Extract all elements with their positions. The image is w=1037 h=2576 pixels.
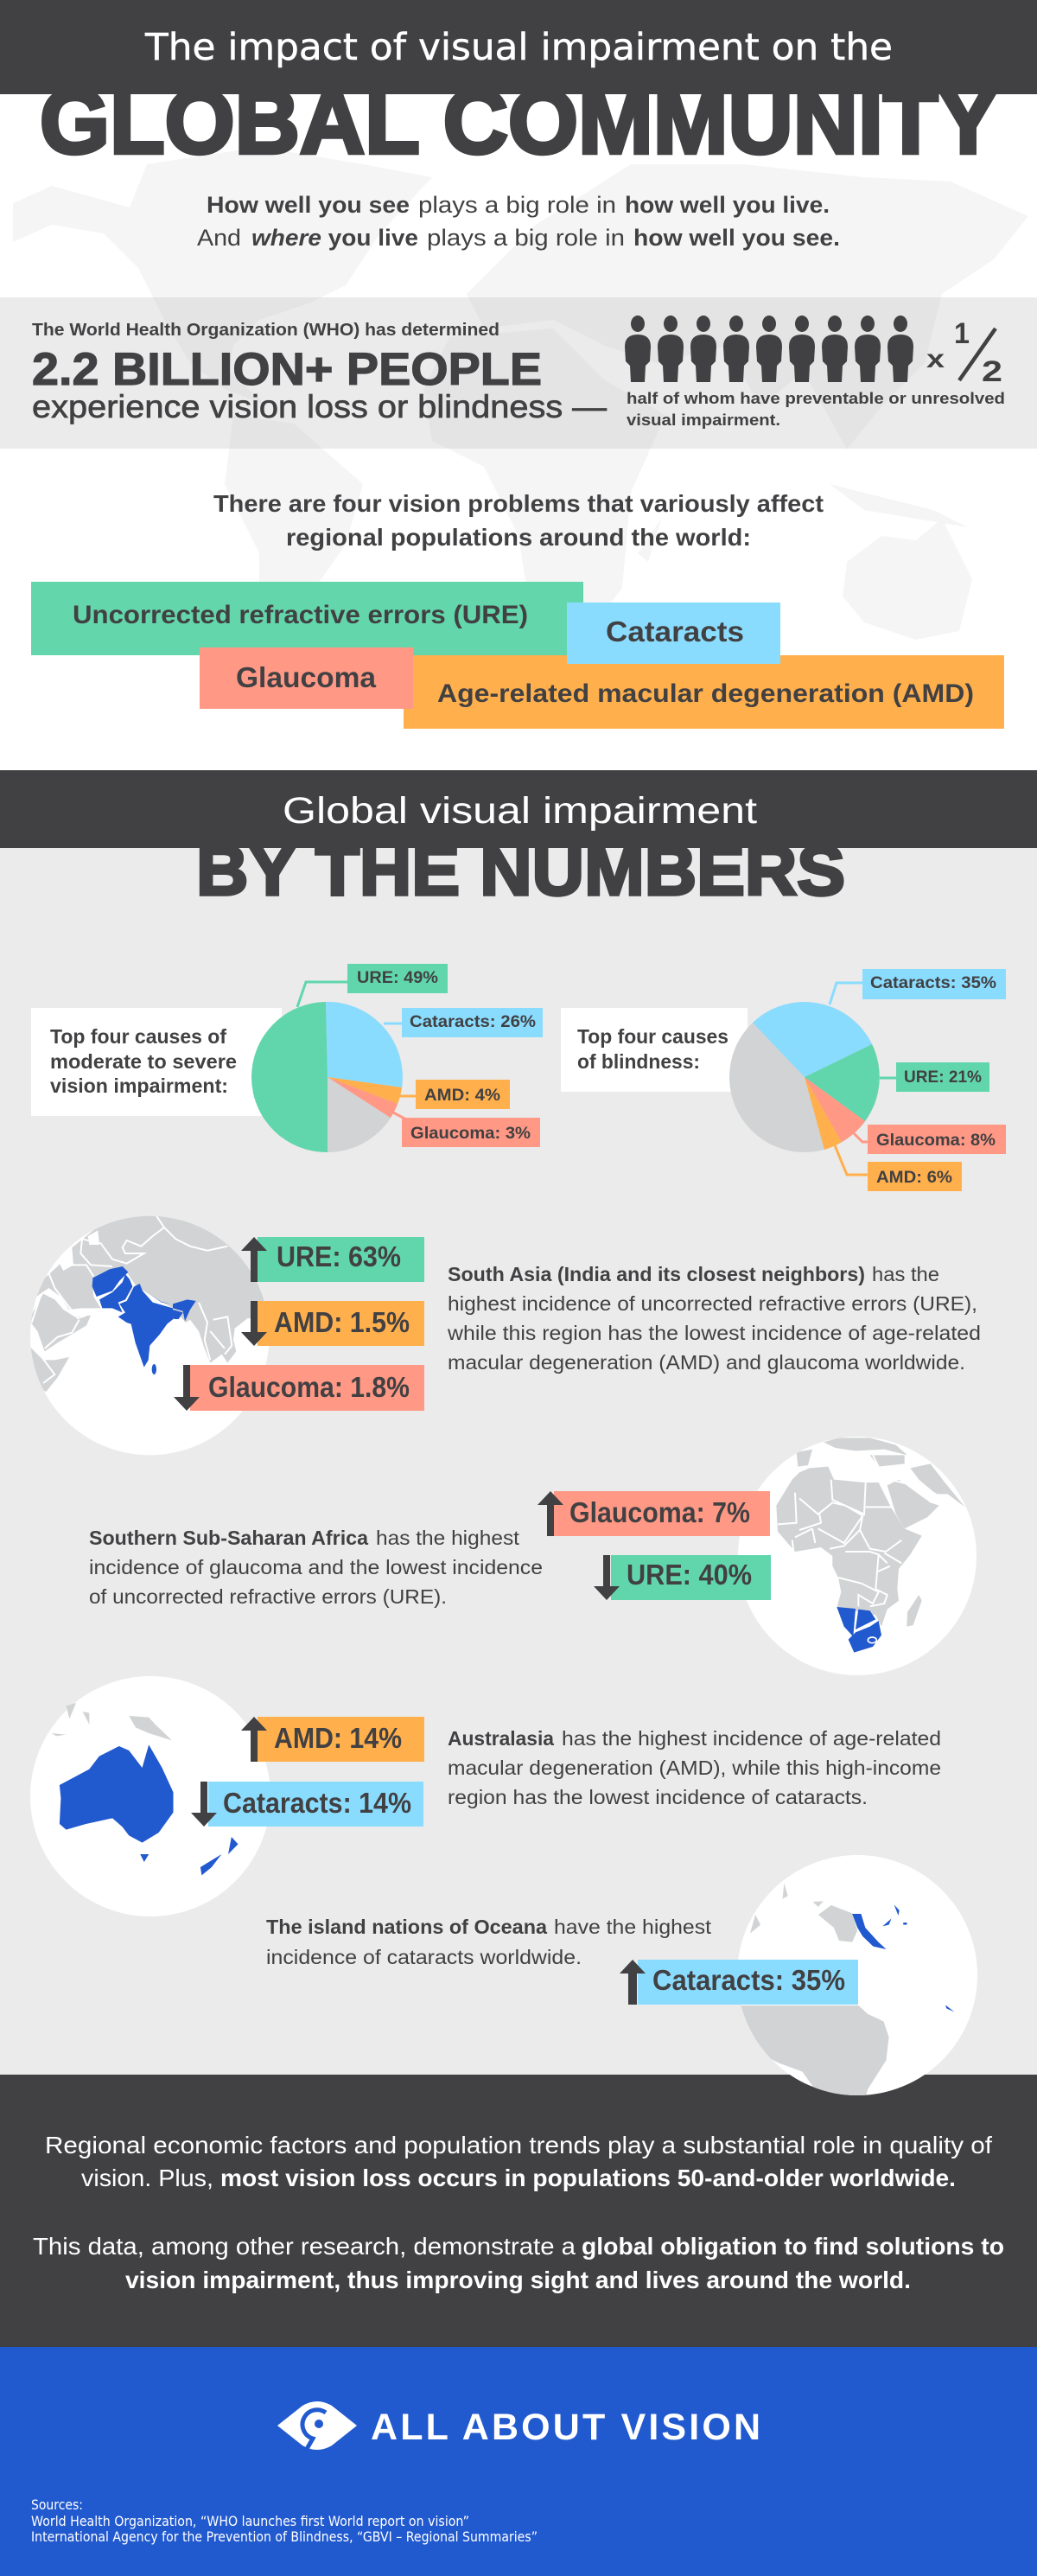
label: AMD 6% bbox=[835, 1145, 962, 1191]
section bar: Global visual impairment: Global visual impairment bbox=[283, 790, 757, 832]
label: URE 21%: URE: 21% bbox=[904, 1068, 982, 1087]
stat: AMD 1.5% down bbox=[241, 1301, 424, 1346]
stat: URE 40% down: URE: 40% bbox=[627, 1559, 752, 1591]
panel: Australasia bbox=[30, 1676, 941, 1916]
text: Southern Sub-Saharan Africa: has the highest bbox=[376, 1527, 520, 1549]
intro text: how well you live. bbox=[625, 192, 830, 218]
caption box bbox=[561, 1008, 748, 1092]
sources bbox=[31, 2496, 538, 2545]
header bar with title line: The impact of visual impairment on the bbox=[144, 26, 893, 69]
text: Oceania: incidence of cataracts worldwide. bbox=[266, 1946, 582, 1968]
times one half: x bbox=[926, 345, 945, 373]
label: AMD 6%: AMD: 6% bbox=[876, 1168, 952, 1187]
label: Cataracts 35%: Cataracts: 35% bbox=[870, 973, 996, 992]
closing text: vision impairment, thus improving sight and lives around the world. bbox=[125, 2267, 911, 2293]
stat: Cataracts 14% down bbox=[191, 1782, 423, 1827]
caption box: Top four causes of bbox=[50, 1025, 226, 1048]
closing text: vision. Plus, bbox=[81, 2165, 213, 2191]
closing text: most vision loss occurs in populations 50-and-older worldwide. bbox=[220, 2165, 956, 2191]
background: numbers section bbox=[0, 848, 1037, 2075]
tag: URE bbox=[31, 582, 583, 655]
label: AMD 4%: AMD: 4% bbox=[424, 1086, 500, 1105]
intro text: plays a big role in bbox=[427, 225, 625, 251]
caption box: moderate to severe bbox=[50, 1050, 237, 1073]
stat: Cataracts 35% up bbox=[620, 1960, 858, 2005]
tag: Glaucoma: Glaucoma bbox=[236, 661, 377, 693]
tag: Cataracts: Cataracts bbox=[606, 615, 744, 647]
stat: URE 63% up bbox=[241, 1237, 424, 1282]
caption box: Top four causes bbox=[577, 1025, 728, 1048]
tag: Cataracts bbox=[567, 603, 780, 664]
stat: Cataracts 35% up: Cataracts: 35% bbox=[652, 1964, 845, 1996]
world map watermark bbox=[13, 147, 1028, 666]
text: South Asia: has the bbox=[872, 1263, 939, 1285]
WHO statistic text: 2.2 BILLION+ PEOPLE bbox=[32, 344, 542, 395]
label: Glaucoma 8% bbox=[853, 1125, 1006, 1154]
lead-in to four vision problems: regional populations around the world: bbox=[286, 524, 751, 551]
stat: Cataracts 14% down: Cataracts: 14% bbox=[223, 1787, 411, 1819]
logo: All About Vision bbox=[277, 2401, 760, 2450]
text: South Asia: South Asia (India and its closest neighbors) bbox=[448, 1263, 865, 1285]
times one half bbox=[926, 317, 1002, 388]
tag: AMD bbox=[404, 655, 1004, 729]
stat: Glaucoma 1.8% down bbox=[174, 1365, 424, 1411]
stat: Glaucoma 7% up: Glaucoma: 7% bbox=[569, 1496, 750, 1528]
text: Australasia: Australasia bbox=[448, 1727, 554, 1750]
intro text: How well you see bbox=[207, 192, 410, 218]
gray band: WHO statistic background bbox=[0, 297, 1037, 449]
WHO statistic text: The World Health Organization (WHO) has determined bbox=[32, 321, 499, 340]
text: South Asia: highest incidence of uncorrected refractive errors (URE), bbox=[448, 1292, 977, 1315]
sources: International Agency for the Prevention of Blindness, “GBVI – Regional Summaries” bbox=[31, 2528, 538, 2545]
icon: row of nine people bbox=[625, 316, 913, 382]
tag: URE: Uncorrected refractive errors (URE) bbox=[73, 601, 528, 629]
label: Glaucoma 8%: Glaucoma: 8% bbox=[876, 1131, 996, 1150]
text: Oceania: The island nations of Oceana bbox=[266, 1916, 547, 1938]
sources: World Health Organization, “WHO launches first World report on vision” bbox=[31, 2513, 469, 2529]
text: South Asia: while this region has the lowest incidence of age-related bbox=[447, 1322, 981, 1344]
intro text: where you live bbox=[251, 225, 418, 251]
half-of-whom note bbox=[627, 389, 1005, 429]
text: Southern Sub-Saharan Africa: Southern Sub-Saharan Africa bbox=[89, 1527, 368, 1549]
footer background bbox=[0, 2347, 1037, 2576]
label: URE 49% bbox=[297, 964, 448, 1007]
logo: All About Vision: ALL ABOUT VISION bbox=[371, 2407, 760, 2448]
intro text: plays a big role in bbox=[418, 192, 616, 218]
label: Glaucoma 3%: Glaucoma: 3% bbox=[410, 1124, 531, 1143]
half-of-whom note: half of whom have preventable or unresolved bbox=[627, 389, 1005, 407]
globe: Africa bbox=[738, 1437, 977, 1675]
half-of-whom note: visual impairment. bbox=[627, 411, 780, 429]
pie chart bbox=[251, 1002, 403, 1152]
WHO statistic text bbox=[32, 321, 607, 424]
text: Australasia: has the highest incidence of age-related bbox=[562, 1727, 941, 1750]
text: Southern Sub-Saharan Africa: incidence of glaucoma and the lowest incidence bbox=[89, 1556, 543, 1578]
icon: eye bbox=[277, 2401, 357, 2450]
caption box: of blindness: bbox=[577, 1050, 700, 1073]
text: Australasia bbox=[448, 1727, 941, 1808]
panel: South Asia bbox=[29, 1212, 981, 1455]
label: URE 49%: URE: 49% bbox=[357, 968, 438, 987]
caption box bbox=[31, 1008, 282, 1116]
times one half: 2 bbox=[982, 355, 1002, 388]
intro text: And bbox=[197, 225, 241, 251]
label: Cataracts 26%: Cataracts: 26% bbox=[410, 1012, 536, 1031]
panel: causes of blindness bbox=[561, 969, 1006, 1191]
text: South Asia bbox=[447, 1263, 981, 1374]
stat: URE 63% up: URE: 63% bbox=[277, 1240, 401, 1272]
globe: South Asia bbox=[29, 1212, 270, 1455]
text: Australasia: macular degeneration (AMD), while this high-income bbox=[448, 1757, 941, 1779]
text: Oceania bbox=[266, 1916, 712, 1968]
title: GLOBAL COMMUNITY: GLOBAL COMMUNITY bbox=[40, 71, 998, 173]
closing text: This data, among other research, demonstrate a bbox=[33, 2233, 576, 2260]
text: Australasia: region has the lowest incidence of cataracts. bbox=[448, 1786, 868, 1808]
tag: Glaucoma bbox=[200, 647, 413, 709]
tag: AMD: Age-related macular degeneration (AMD) bbox=[437, 679, 974, 708]
closing text bbox=[33, 2132, 1004, 2293]
times one half: 1 bbox=[954, 317, 970, 350]
lead-in to four vision problems bbox=[213, 490, 824, 551]
header bar with title line bbox=[0, 0, 1037, 94]
label: URE 21% bbox=[880, 1062, 989, 1092]
stat: AMD 14% up: AMD: 14% bbox=[274, 1722, 402, 1754]
globe: Australasia bbox=[30, 1676, 270, 1916]
sources: Sources: bbox=[31, 2496, 83, 2513]
globe: Oceania bbox=[735, 1855, 977, 2098]
lead-in to four vision problems: There are four vision problems that variously affect bbox=[213, 490, 824, 517]
panel: Southern Sub-Saharan Africa bbox=[89, 1437, 977, 1675]
label: Cataracts 26% bbox=[384, 1008, 543, 1037]
WHO statistic text: experience vision loss or blindness — bbox=[32, 389, 607, 424]
closing text: global obligation to find solutions to bbox=[582, 2233, 1004, 2260]
intro text: how well you see. bbox=[633, 225, 840, 251]
section bar: Global visual impairment bbox=[0, 770, 1037, 848]
heading: BY THE NUMBERS: BY THE NUMBERS bbox=[196, 832, 845, 910]
stat: AMD 14% up bbox=[241, 1717, 424, 1762]
stat: Glaucoma 7% up bbox=[538, 1491, 770, 1536]
stat: Glaucoma 1.8% down: Glaucoma: 1.8% bbox=[208, 1371, 410, 1403]
stat: AMD 1.5% down: AMD: 1.5% bbox=[274, 1306, 410, 1338]
panel: causes of moderate to severe vision impairment bbox=[31, 964, 543, 1152]
text: Southern Sub-Saharan Africa: of uncorrected refractive errors (URE). bbox=[89, 1585, 447, 1608]
text: South Asia: macular degeneration (AMD) and glaucoma worldwide. bbox=[448, 1351, 965, 1374]
closing text: Regional economic factors and population trends play a substantial role in quality of bbox=[45, 2132, 992, 2158]
closing bar background bbox=[0, 2075, 1037, 2347]
label: AMD 4% bbox=[397, 1080, 510, 1109]
panel: Oceania bbox=[266, 1855, 977, 2098]
pie chart bbox=[729, 1002, 880, 1152]
label: Glaucoma 3% bbox=[393, 1113, 540, 1147]
stat: URE 40% down bbox=[594, 1555, 771, 1600]
text: Southern Sub-Saharan Africa bbox=[89, 1527, 543, 1608]
text: Oceania: have the highest bbox=[554, 1916, 712, 1938]
label: Cataracts 35% bbox=[830, 969, 1006, 1004]
intro text bbox=[197, 192, 840, 251]
caption box: vision impairment: bbox=[50, 1074, 228, 1097]
